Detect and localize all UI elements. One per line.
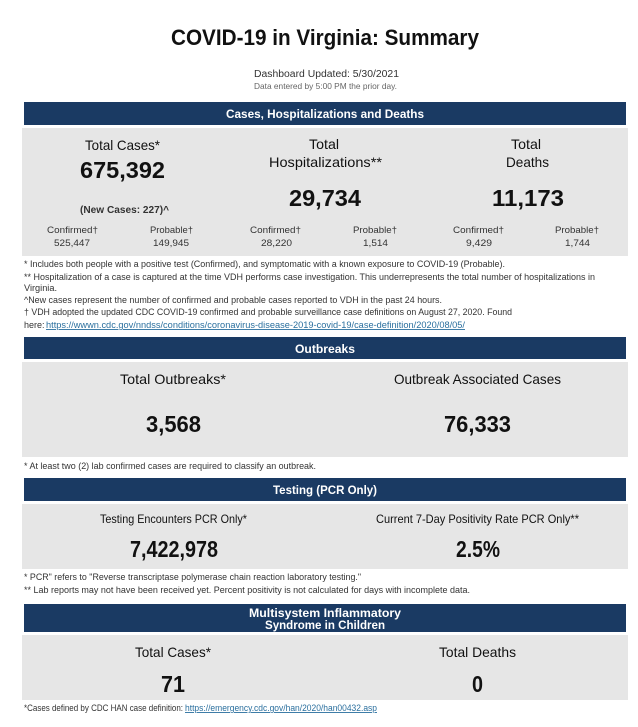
footnote: MIS-C case definition (24, 703, 377, 713)
total cases label: Total Cases* (85, 137, 161, 153)
dashboard update date: Dashboard Updated: 5/30/2021 (254, 69, 399, 80)
total hospitalizations label (269, 136, 383, 170)
total deaths label (506, 136, 549, 170)
total deaths label: Deaths (506, 154, 549, 170)
footnote: MIS-C case definition: https://emergency.cdc.gov/han/2020/han00432.asp (185, 703, 377, 713)
testing encounters value: 7,422,978 (130, 536, 218, 562)
total cases value: 675,392 (80, 157, 165, 183)
deaths probable: 1,744 (565, 238, 590, 249)
MIS-C total cases value: 71 (161, 671, 185, 697)
deaths probable: Probable† (555, 225, 599, 236)
hospitalizations probable: 1,514 (363, 238, 388, 249)
total outbreaks label: Total Outbreaks* (120, 371, 227, 387)
footnotes: cases: ** Hospitalization of a case is captured at the time VDH performs case investigation. This underrepresents the total number of hospitalizations in (24, 272, 595, 282)
cases probable (150, 225, 193, 249)
footnotes: testing (24, 572, 470, 595)
cases confirmed (47, 225, 98, 249)
cases confirmed: Confirmed† (47, 225, 98, 236)
MIS-C total deaths label: Total Deaths (439, 644, 516, 660)
deaths confirmed: Confirmed† (453, 225, 504, 236)
data entry note: Data entered by 5:00 PM the prior day. (254, 81, 397, 91)
deaths probable (555, 225, 599, 249)
section header: multisystem inflammatory syndrome: Multisystem Inflammatory (249, 606, 401, 620)
total hospitalizations label: Hospitalizations** (269, 154, 383, 170)
footnotes: cases: * Includes both people with a positive test (Confirmed), and symptomatic with a known exposure to COVID-19 (Probable). (24, 259, 505, 269)
footnotes: cases: † VDH adopted the updated CDC COVID-19 confirmed and probable surveillance case definitions on August 27, 2020. Found (24, 307, 512, 317)
positivity rate label: Current 7-Day Positivity Rate PCR Only** (376, 512, 579, 526)
hospitalizations confirmed (250, 225, 301, 249)
section header: testing: Testing (PCR Only) (273, 483, 377, 497)
footnote: MIS-C case definition: *Cases defined by CDC HAN case definition: (24, 703, 183, 713)
footnotes: cases: here: (24, 320, 45, 330)
new cases: (New Cases: 227)^ (80, 205, 169, 216)
cases confirmed: 525,447 (54, 238, 90, 249)
outbreak associated cases label: Outbreak Associated Cases (394, 371, 561, 387)
total hospitalizations label: Total (309, 136, 339, 152)
section header: outbreaks (24, 337, 626, 359)
footnotes: testing: * PCR" refers to "Reverse transcriptase polymerase chain reaction laboratory testing." (24, 572, 361, 582)
section header: cases (24, 102, 626, 125)
section header: outbreaks: Outbreaks (295, 342, 355, 356)
hospitalizations probable: Probable† (353, 225, 397, 236)
section header: multisystem inflammatory syndrome: Syndrome in Children (265, 618, 385, 632)
section header: multisystem inflammatory syndrome (24, 604, 626, 632)
footnotes: cases (24, 259, 595, 330)
section header: cases: Cases, Hospitalizations and Deaths (226, 107, 424, 121)
footnotes: testing: ** Lab reports may not have been received yet. Percent positivity is not calculated for days with incomplete data. (24, 585, 470, 595)
footnote: outbreaks: * At least two (2) lab confirmed cases are required to classify an outbreak. (24, 461, 316, 471)
footnotes: cases: Virginia. (24, 283, 57, 293)
hospitalizations confirmed: 28,220 (261, 238, 292, 249)
section header: testing (24, 478, 626, 501)
outbreak associated cases value: 76,333 (444, 411, 511, 437)
total deaths label: Total (511, 136, 541, 152)
hospitalizations probable (353, 225, 397, 249)
total deaths value: 11,173 (492, 185, 564, 211)
panel: cases, hospitalizations and deaths (22, 128, 628, 256)
total outbreaks value: 3,568 (146, 411, 201, 437)
panel: multisystem inflammatory syndrome (22, 635, 628, 700)
panel: outbreaks (22, 362, 628, 457)
total hospitalizations value: 29,734 (289, 185, 361, 211)
footnotes: cases: ^New cases represent the number of confirmed and probable cases reported to VDH in the past 24 hours. (24, 295, 442, 305)
hospitalizations confirmed: Confirmed† (250, 225, 301, 236)
MIS-C total cases label: Total Cases* (135, 644, 212, 660)
deaths confirmed: 9,429 (466, 238, 492, 249)
MIS-C total deaths value: 0 (472, 671, 483, 697)
cases probable: Probable† (150, 225, 193, 236)
title: COVID-19 in Virginia: Summary (171, 25, 480, 50)
testing encounters label: Testing Encounters PCR Only* (100, 512, 247, 526)
panel: testing (22, 504, 628, 569)
positivity rate value: 2.5% (456, 536, 500, 562)
deaths confirmed (453, 225, 504, 249)
cases probable: 149,945 (153, 238, 189, 249)
footnotes: cases: https://wwwn.cdc.gov/nndss/conditions/coronavirus-disease-2019-covid-19/case-definition/2020/08/05/ (46, 320, 466, 330)
